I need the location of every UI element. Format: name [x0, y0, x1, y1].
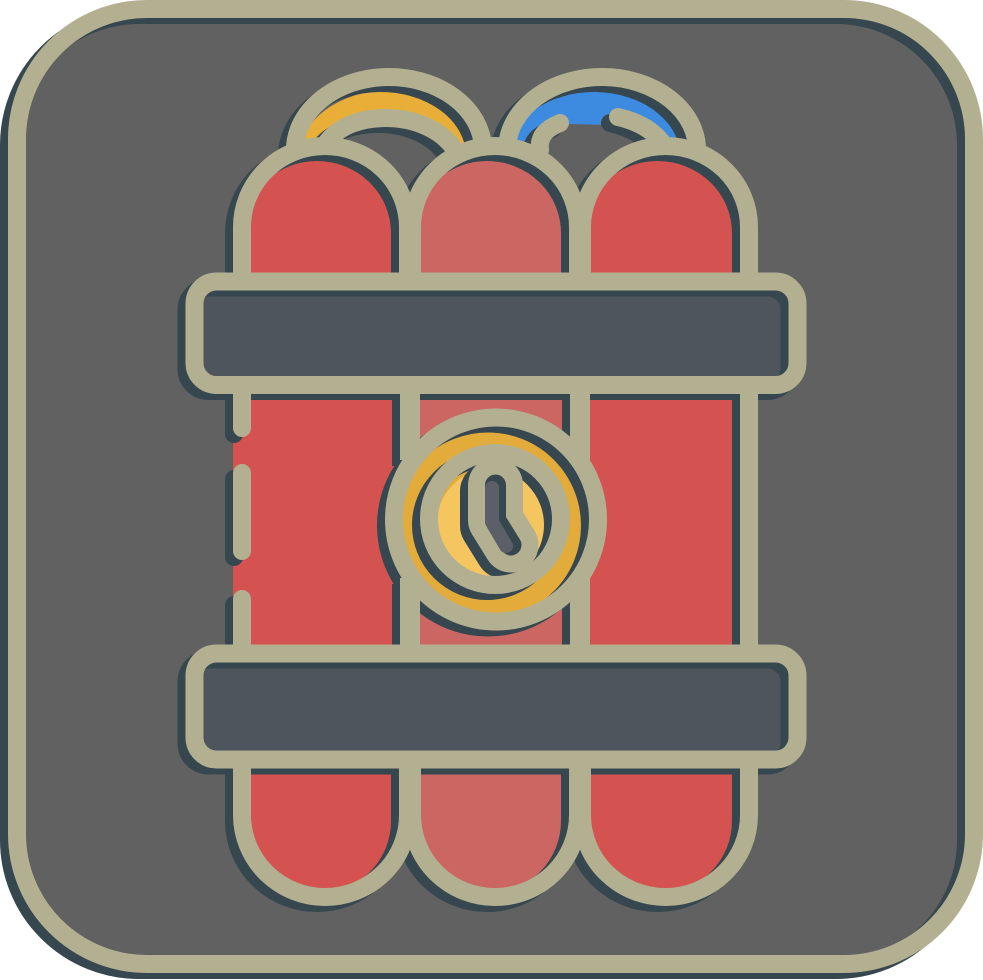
- timer: dial: [400, 424, 590, 614]
- strap: bottom band: [194, 654, 798, 760]
- dynamite stick: right: [582, 146, 749, 897]
- fuse: blue wire: [512, 90, 695, 152]
- dynamite stick: middle: [412, 146, 578, 897]
- strap: top band: [194, 282, 798, 385]
- dynamite stick: left: [233, 146, 408, 897]
- fuse: yellow wire: [300, 90, 478, 150]
- timer: clock hand: [492, 485, 511, 546]
